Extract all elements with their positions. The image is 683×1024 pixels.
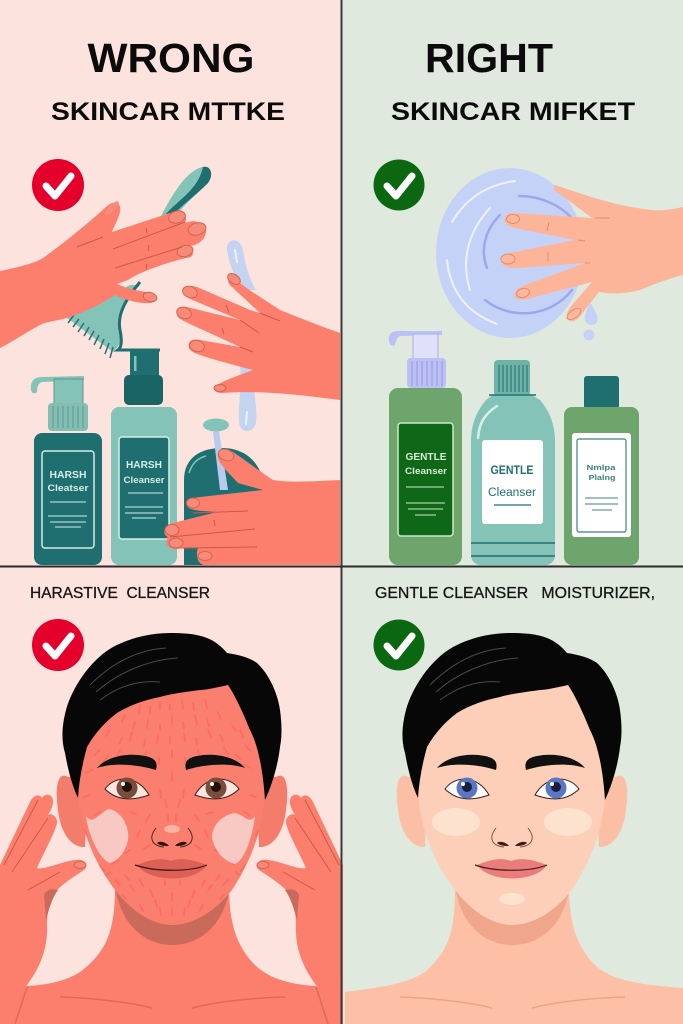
- bottle: gentle cleanser left: GENTLE: [406, 451, 446, 463]
- illustration: healthy face portrait: [345, 633, 683, 1024]
- bottle: small product right: Nmlpa: [586, 463, 617, 472]
- illustration: lower-right hand: [164, 447, 340, 565]
- eyes: [445, 779, 579, 799]
- ears: [57, 775, 287, 847]
- bottle: small product right: [564, 376, 639, 565]
- eyes: [105, 779, 239, 799]
- eyebrows: [97, 755, 245, 770]
- neck shadow: [455, 885, 570, 945]
- icon: green check top: [374, 160, 424, 210]
- bottle: gentle cleanser middle: GENTLE: [490, 465, 534, 477]
- title: right: RIGHT: [425, 35, 553, 81]
- chin highlight: [499, 893, 525, 905]
- bottle: harsh cleanser middle: HARSH: [126, 459, 162, 471]
- illustration: collarbone lines left: [15, 987, 328, 1024]
- bottle: harsh cleanser left: [31, 376, 102, 565]
- bottle: harsh cleanser left: Cleatser: [48, 483, 89, 493]
- illustration: middle-right hand: [175, 271, 340, 400]
- illustration: upper-left hand: [0, 200, 207, 348]
- face skin: [418, 680, 606, 925]
- bottle: harsh cleanser middle: Cleanser: [124, 475, 165, 486]
- redness marks: [84, 700, 258, 915]
- hair: [62, 633, 282, 800]
- body and neck: [15, 885, 328, 1024]
- illustration: left hand touching face: [0, 795, 86, 1024]
- lips: [137, 859, 207, 878]
- bottle: gentle cleanser middle: Cleanser: [488, 487, 536, 499]
- eyebrows: [437, 755, 585, 770]
- panel: wrong background: [0, 0, 342, 1024]
- bottle: gentle cleanser left: Cleanser: [405, 466, 447, 477]
- icon: water drops: [584, 302, 598, 340]
- lips: [477, 859, 547, 878]
- title: wrong: WRONG: [88, 35, 254, 81]
- subtitle: right: SKINCAR MIFKET: [391, 98, 635, 126]
- nose: [164, 825, 180, 833]
- bottle: gentle cleanser left: [389, 331, 462, 565]
- bottle: dark jar with roller: [184, 418, 265, 565]
- body and neck: [345, 885, 683, 1024]
- face skin: [78, 680, 266, 925]
- illustration: brush: [67, 167, 211, 358]
- bottle: gentle cleanser middle: [471, 360, 555, 565]
- panel: right background: [342, 0, 683, 1024]
- subtitle: wrong: SKINCAR MTTKE: [51, 98, 285, 126]
- icon: red check top: [32, 159, 84, 211]
- cream patches: [86, 809, 128, 863]
- caption: harsh cleanser: HARASTIVE CLEANSER: [30, 585, 210, 602]
- illustration: right hand touching face: [257, 795, 343, 1024]
- cream patches: [432, 808, 480, 836]
- icon: green check bottom: [374, 620, 424, 670]
- illustration: irritated face portrait: [15, 633, 328, 1024]
- caption: gentle cleanser and moisturizer: GENTLE CLEANSER MOISTURIZER,: [375, 585, 655, 602]
- divider: vertical: [340, 0, 342, 1024]
- illustration: cream spatula: [227, 240, 256, 431]
- illustration: collarbone lines right: [400, 997, 625, 1008]
- neck shadow: [115, 885, 230, 945]
- ears: [397, 775, 627, 847]
- bottle: harsh cleanser left: HARSH: [50, 470, 86, 481]
- bottle: small product right: Plalng: [588, 473, 616, 482]
- illustration: water disc: [436, 168, 584, 338]
- bottle: harsh cleanser middle: [111, 350, 177, 565]
- illustration: right hand on disc: [501, 185, 683, 322]
- hair: [402, 633, 622, 800]
- nose: [492, 828, 532, 847]
- icon: red check bottom: [32, 619, 84, 671]
- divider: horizontal: [0, 566, 683, 568]
